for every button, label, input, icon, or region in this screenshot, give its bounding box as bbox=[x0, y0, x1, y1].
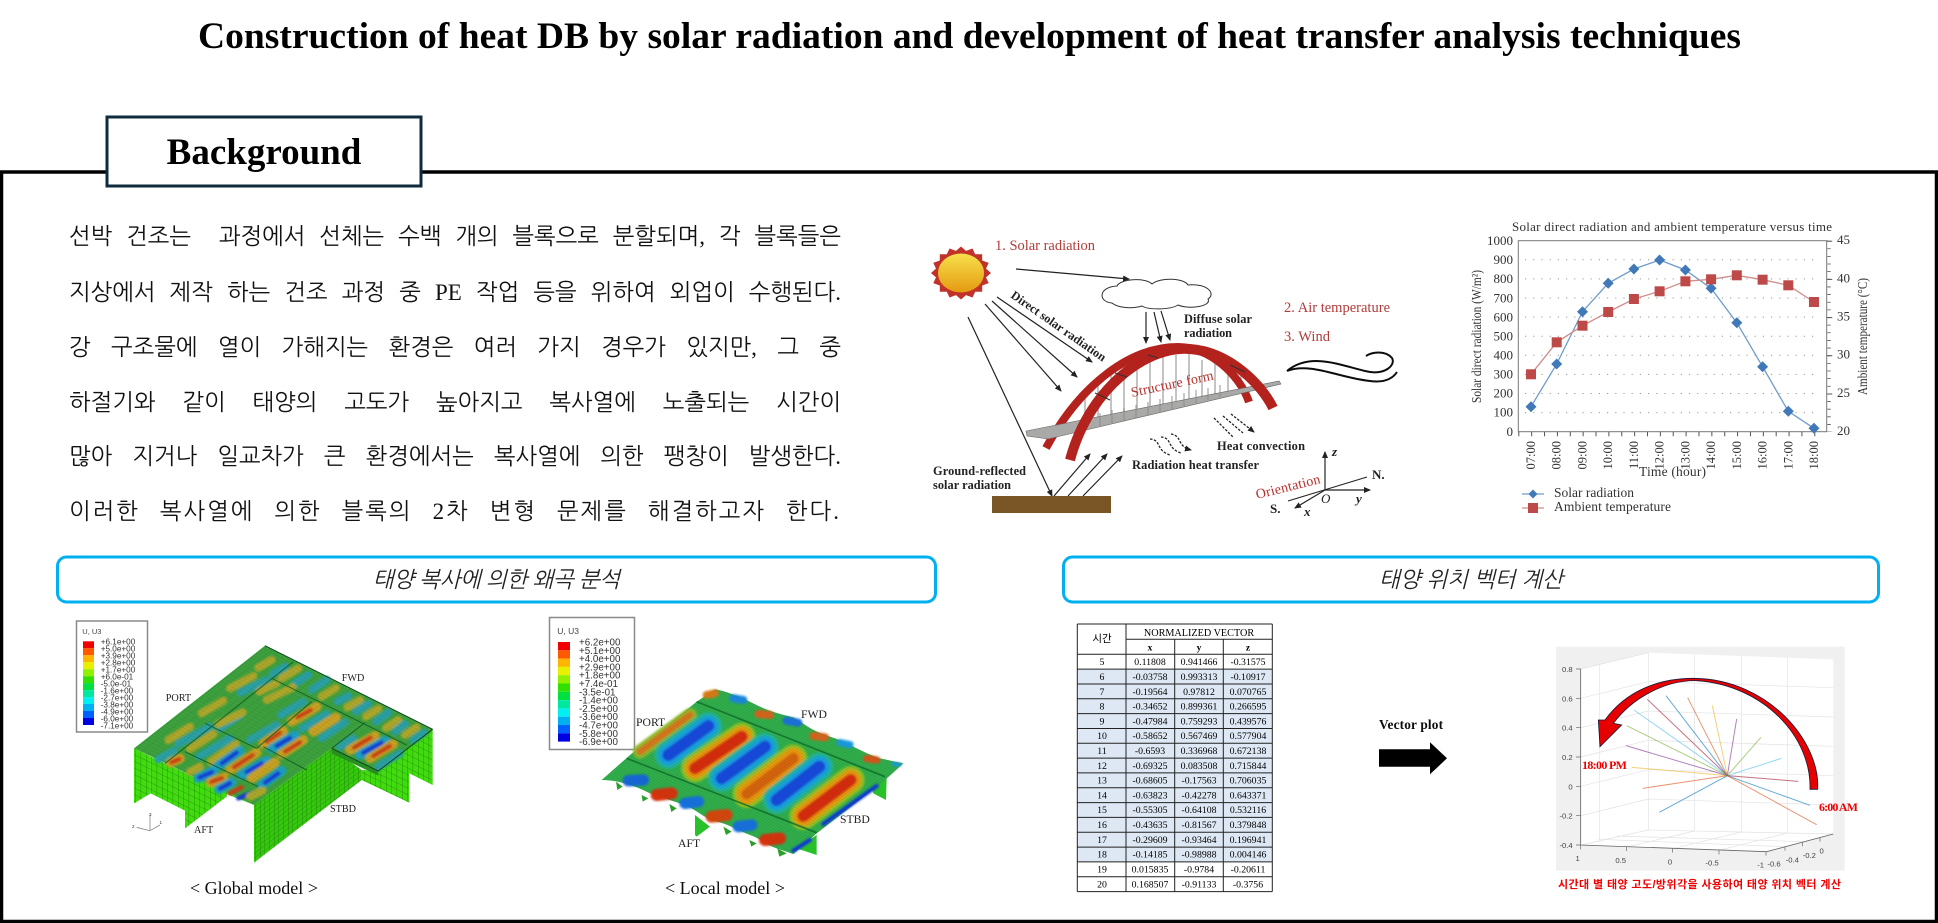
caption: global model: < Global model > bbox=[190, 878, 318, 898]
orientation axes: y bbox=[1354, 491, 1362, 506]
heading: Background tab: Background bbox=[167, 132, 362, 173]
table body: -0.34652 bbox=[1132, 702, 1168, 712]
right axis labels bbox=[1837, 232, 1850, 438]
right axis labels: 35 bbox=[1837, 308, 1850, 324]
table body: -0.17563 bbox=[1181, 776, 1217, 786]
label: air temperature and wind bbox=[1284, 300, 1390, 345]
local model contour legend: +4.0e+00 bbox=[579, 654, 621, 665]
local model contour legend: -4.7e+00 bbox=[579, 720, 618, 732]
table body: -0.58652 bbox=[1132, 731, 1168, 742]
table body: -0.91133 bbox=[1182, 880, 1216, 890]
plot background and axes: 0 bbox=[1820, 846, 1824, 855]
label: structure form: Structure form bbox=[1130, 369, 1215, 401]
x axis labels: 15:00 bbox=[1730, 441, 1744, 469]
figure: local model bbox=[550, 618, 903, 898]
x axis labels: 12:00 bbox=[1653, 441, 1667, 469]
orientation axes: N. bbox=[1372, 467, 1385, 482]
text block: background description: 지상에서 제작 하는 건조 과정 중 PE 작업 등을 위하여 외업이 수행된다. bbox=[69, 280, 841, 305]
section bar: solar position vector: 태양 위치 벡터 계산 bbox=[1379, 567, 1566, 592]
table body: 9 bbox=[1100, 716, 1105, 728]
plot background and axes: 1 bbox=[1576, 854, 1580, 863]
table grid bbox=[1077, 624, 1272, 892]
label: ground-reflected solar radiation: Ground-reflected bbox=[933, 464, 1026, 478]
x axis labels: 11:00 bbox=[1627, 441, 1641, 469]
table body: 0.759293 bbox=[1181, 716, 1217, 728]
section bar: solar position vector bbox=[1064, 557, 1878, 602]
x axis labels: 17:00 bbox=[1781, 441, 1795, 469]
plot background and axes: -0.4 bbox=[1786, 855, 1800, 864]
caption: vector plot: 시간대 별 태양 고도/방위각을 사용하여 태양 위치 벡터 계산 bbox=[1558, 877, 1841, 891]
table body: -0.9784 bbox=[1184, 864, 1214, 876]
label: vector plot: Vector plot bbox=[1379, 717, 1444, 732]
label: 6:00 AM: 6:00 AM bbox=[1819, 800, 1858, 814]
plot background and axes: -0.2 bbox=[1559, 812, 1573, 821]
table body: 11 bbox=[1097, 746, 1107, 757]
grid lines bbox=[1525, 260, 1820, 413]
left axis labels: 900 bbox=[1494, 252, 1513, 267]
table body: 0.015835 bbox=[1132, 864, 1168, 876]
chart: solar radiation and ambient temperature bbox=[1469, 219, 1870, 514]
local model labels: STBD bbox=[840, 813, 870, 826]
global model triad: 2 bbox=[132, 824, 135, 829]
x axis labels: 09:00 bbox=[1576, 441, 1590, 469]
table body: 0.567469 bbox=[1181, 731, 1217, 742]
label: solar radiation: 1. Solar radiation bbox=[995, 238, 1096, 254]
global model contour legend: +2.8e+00 bbox=[101, 658, 136, 667]
table body: 17 bbox=[1097, 835, 1107, 846]
local model contour legend: -5.8e+00 bbox=[579, 729, 618, 740]
chart legend: Ambient temperature bbox=[1554, 499, 1671, 514]
table body: -0.98988 bbox=[1181, 850, 1217, 860]
local model labels: FWD bbox=[801, 708, 827, 721]
x axis labels: 07:00 bbox=[1524, 441, 1538, 469]
caption: local model: < Local model > bbox=[665, 878, 785, 898]
x axis labels bbox=[1524, 441, 1821, 469]
left axis labels: 100 bbox=[1494, 404, 1513, 420]
global model labels: PORT bbox=[166, 693, 192, 704]
left axis labels: 800 bbox=[1494, 271, 1513, 286]
label: ground-reflected solar radiation bbox=[933, 464, 1026, 492]
table body: 10 bbox=[1097, 731, 1107, 742]
global model labels: AFT bbox=[194, 825, 214, 836]
icon: heat convection arrows bbox=[1214, 414, 1254, 437]
global model contour legend: -3.8e+00 bbox=[101, 700, 134, 709]
right axis labels: 20 bbox=[1837, 423, 1850, 438]
plot background and axes: -0.4 bbox=[1559, 841, 1573, 850]
section bar: solar radiation distortion analysis: 태양 복사에 의한 왜곡 분석 bbox=[373, 567, 622, 592]
label: air temperature and wind: 2. Air temperature bbox=[1284, 300, 1390, 316]
table body: 0.577904 bbox=[1230, 731, 1266, 742]
axis ticks bbox=[1518, 241, 1830, 434]
table header: NORMALIZED VECTOR bbox=[1144, 628, 1254, 639]
icon: sun bbox=[931, 246, 991, 300]
global model contour legend: -5.0e-01 bbox=[101, 679, 132, 688]
arrow: sun to cloud bbox=[1016, 269, 1129, 279]
text block: background description: 이러한 복사열에 의한 블록의 2차 변형 문제를 해결하고자 한다. bbox=[69, 499, 841, 524]
arrows: ground reflection bbox=[1054, 454, 1122, 496]
table body: 0.070765 bbox=[1230, 687, 1266, 698]
global model contour legend: +1.7e+00 bbox=[101, 665, 136, 674]
table body: 0.643371 bbox=[1230, 790, 1266, 802]
local model labels: AFT bbox=[678, 837, 700, 850]
table body: -0.93464 bbox=[1181, 835, 1217, 846]
table body: 0.672138 bbox=[1230, 746, 1266, 757]
arrow: sun path curve bbox=[1598, 678, 1818, 789]
right axis title: Ambient temperature (°C) bbox=[1855, 278, 1870, 395]
local model contour legend: +6.2e+00 bbox=[579, 638, 621, 648]
table body: -0.55305 bbox=[1132, 805, 1168, 816]
table body: 5 bbox=[1100, 657, 1105, 668]
local model contour legend: -3.5e-01 bbox=[579, 687, 616, 698]
table body: -0.63823 bbox=[1132, 790, 1168, 802]
x axis labels: 18:00 bbox=[1807, 441, 1821, 469]
table body: -0.31575 bbox=[1230, 657, 1266, 668]
plot background and axes bbox=[1556, 647, 1845, 871]
table body: -0.20611 bbox=[1231, 864, 1265, 876]
table body: 0.439576 bbox=[1230, 716, 1266, 728]
orientation axes: S. bbox=[1270, 501, 1280, 516]
left axis labels: 1000 bbox=[1487, 233, 1513, 248]
right axis labels: 30 bbox=[1837, 346, 1850, 362]
table body: 8 bbox=[1100, 702, 1105, 712]
label: direct solar radiation: Direct solar radiation bbox=[1008, 288, 1109, 364]
plot background and axes: -0.2 bbox=[1803, 851, 1816, 860]
table body: 0.97812 bbox=[1183, 687, 1215, 698]
table body: 7 bbox=[1100, 687, 1105, 698]
text block: background description bbox=[69, 224, 841, 524]
table header: 시간 bbox=[1092, 633, 1112, 645]
label: diffuse solar radiation: radiation bbox=[1184, 326, 1232, 340]
x axis title: Time (hour) bbox=[1639, 464, 1706, 479]
heading: Background tab bbox=[107, 117, 421, 186]
right axis labels: 45 bbox=[1837, 232, 1850, 247]
table body: -0.3756 bbox=[1233, 880, 1263, 890]
plot background and axes: 0 bbox=[1668, 858, 1672, 867]
label: diffuse solar radiation bbox=[1184, 312, 1253, 340]
table body: -0.64108 bbox=[1181, 805, 1217, 816]
table header: x bbox=[1148, 644, 1153, 654]
table body: 0.196941 bbox=[1230, 835, 1266, 846]
arrow: table to vector plot bbox=[1379, 742, 1447, 774]
global model triad bbox=[132, 812, 162, 831]
table header bbox=[1092, 628, 1254, 654]
table body bbox=[1097, 657, 1266, 890]
global model contour legend: +6.0e-01 bbox=[101, 672, 134, 681]
table header: z bbox=[1246, 644, 1251, 654]
table body: -0.03758 bbox=[1132, 672, 1168, 683]
table body: 0.266595 bbox=[1230, 702, 1266, 712]
global model contour legend: -2.7e+00 bbox=[101, 693, 134, 702]
table body: 0.083508 bbox=[1181, 761, 1217, 772]
global model contour legend: -1.6e+00 bbox=[101, 686, 134, 695]
table body: 0.941466 bbox=[1181, 657, 1217, 668]
table blue rows bbox=[1077, 669, 1272, 862]
table body: -0.68605 bbox=[1132, 776, 1168, 786]
chart legend bbox=[1522, 485, 1671, 514]
global model contour legend: +3.9e+00 bbox=[101, 651, 136, 660]
global model labels bbox=[166, 673, 364, 836]
local model labels bbox=[636, 708, 870, 850]
chart title: Solar direct radiation and ambient temperature versus time bbox=[1512, 219, 1832, 234]
series: solar radiation bbox=[1526, 254, 1820, 434]
local model contour legend: +1.8e+00 bbox=[579, 671, 621, 682]
section bar: solar radiation distortion analysis bbox=[58, 557, 936, 602]
global model contour legend bbox=[76, 621, 148, 732]
right axis labels: 40 bbox=[1837, 270, 1850, 286]
plot background and axes: -0.5 bbox=[1705, 859, 1719, 868]
table body: -0.81567 bbox=[1181, 820, 1217, 831]
table body: 14 bbox=[1097, 790, 1107, 802]
global model labels: FWD bbox=[342, 673, 364, 684]
table body: 0.715844 bbox=[1230, 761, 1266, 772]
plot background and axes: 0.8 bbox=[1562, 665, 1573, 674]
local model contour legend: +7.4e-01 bbox=[579, 679, 618, 690]
text block: background description: 선박 건조는 과정에서 선체는 수백 개의 블록으로 분할되며, 각 블록들은 bbox=[69, 224, 841, 249]
text block: background description: 많아 지거나 일교차가 큰 환경에서는 복사열에 의한 팽창이 발생한다. bbox=[69, 444, 841, 469]
local model contour legend: +5.1e+00 bbox=[579, 646, 621, 657]
title: Construction of heat DB by solar radiation and development of heat transfer analysis techniques bbox=[198, 16, 1741, 57]
table header: y bbox=[1197, 644, 1202, 654]
bridge structure bbox=[1026, 347, 1281, 460]
table body: 0.336968 bbox=[1181, 746, 1217, 757]
table body: -0.10917 bbox=[1230, 672, 1266, 683]
table body: 0.004146 bbox=[1230, 850, 1266, 860]
solar position vectors bbox=[1626, 696, 1817, 825]
text block: background description: 하절기와 같이 태양의 고도가 높아지고 복사열에 노출되는 시간이 bbox=[69, 390, 841, 415]
orientation axes: Orientation bbox=[1254, 472, 1322, 503]
table body: 0.11808 bbox=[1134, 657, 1166, 668]
label: radiation heat transfer: Radiation heat transfer bbox=[1132, 458, 1259, 472]
label: air temperature and wind: 3. Wind bbox=[1284, 329, 1331, 345]
table body: -0.19564 bbox=[1132, 687, 1168, 698]
x axis labels: 16:00 bbox=[1756, 441, 1770, 469]
local model contour legend bbox=[550, 618, 634, 750]
orientation axes: O bbox=[1321, 491, 1331, 506]
local model contour legend: U, U3 bbox=[557, 626, 579, 636]
plot background and axes: 0.4 bbox=[1562, 724, 1573, 733]
x axis labels: 08:00 bbox=[1550, 441, 1564, 469]
table body: -0.6593 bbox=[1135, 746, 1165, 757]
left axis labels: 0 bbox=[1506, 424, 1513, 439]
global model ship block bbox=[134, 646, 433, 863]
left axis title: Solar direct radiation (W/m²) bbox=[1469, 270, 1484, 403]
table: normalized vector bbox=[1077, 624, 1272, 892]
x axis labels: 13:00 bbox=[1678, 441, 1692, 469]
orientation axes: z bbox=[1331, 444, 1338, 459]
figure: global model bbox=[76, 621, 433, 898]
table body: -0.14185 bbox=[1132, 850, 1168, 860]
global model contour legend: -6.0e+00 bbox=[101, 714, 134, 723]
table body: 6 bbox=[1100, 672, 1105, 683]
left axis labels: 300 bbox=[1494, 366, 1513, 382]
icon: wind swirl bbox=[1287, 352, 1397, 381]
x axis labels: 14:00 bbox=[1704, 441, 1718, 469]
global model contour legend: +5.0e+00 bbox=[101, 644, 136, 653]
icon: cloud bbox=[1102, 279, 1211, 309]
label: 18:00 PM: 18:00 PM bbox=[1582, 758, 1627, 772]
series: ambient temperature bbox=[1526, 270, 1819, 379]
label: diffuse solar radiation: Diffuse solar bbox=[1184, 312, 1253, 326]
orientation axes bbox=[1254, 444, 1385, 519]
table body: -0.69325 bbox=[1132, 761, 1168, 772]
table body: -0.47984 bbox=[1132, 716, 1168, 728]
plot background and axes: 0.5 bbox=[1615, 856, 1626, 865]
table body: 0.899361 bbox=[1181, 702, 1217, 712]
plot frame bbox=[1518, 241, 1827, 432]
local model contour legend: -6.9e+00 bbox=[579, 737, 618, 748]
global model contour legend: U, U3 bbox=[82, 627, 101, 636]
arrows: diffuse radiation bbox=[1146, 311, 1170, 343]
plot background and axes: 0 bbox=[1568, 782, 1573, 791]
global model labels: STBD bbox=[330, 804, 356, 815]
table body: 0.993313 bbox=[1181, 672, 1217, 683]
plot background and axes: -0.6 bbox=[1767, 860, 1781, 869]
text block: background description: 강 구조물에 열이 가해지는 환경은 여러 가지 경우가 있지만, 그 중 bbox=[69, 335, 841, 360]
table body: 0.168507 bbox=[1132, 880, 1168, 890]
local model plate bbox=[602, 689, 903, 857]
ground block bbox=[992, 496, 1111, 513]
x axis labels: 10:00 bbox=[1601, 441, 1615, 469]
left axis labels: 500 bbox=[1494, 328, 1513, 344]
table body: 12 bbox=[1097, 761, 1107, 772]
orientation axes: x bbox=[1303, 504, 1311, 519]
table body: 0.379848 bbox=[1230, 820, 1266, 831]
left axis labels: 700 bbox=[1494, 290, 1513, 306]
table body: 15 bbox=[1097, 805, 1107, 816]
global model triad: 1 bbox=[160, 820, 162, 825]
icon: radiation heat transfer arrows bbox=[1150, 434, 1191, 455]
local model contour legend: -1.4e+00 bbox=[579, 696, 618, 707]
local model contour legend: -3.6e+00 bbox=[579, 712, 618, 723]
plot background and axes: 0.2 bbox=[1562, 753, 1573, 762]
table body: 0.706035 bbox=[1230, 776, 1266, 786]
label: ground-reflected solar radiation: solar radiation bbox=[933, 478, 1011, 492]
left axis labels bbox=[1487, 233, 1513, 439]
plot background and axes: -1 bbox=[1757, 860, 1764, 869]
global model contour legend: +6.1e+00 bbox=[101, 637, 136, 646]
table body: 19 bbox=[1097, 864, 1107, 876]
local model contour legend: -2.5e+00 bbox=[579, 704, 618, 715]
global model contour legend: -7.1e+00 bbox=[101, 721, 134, 730]
global model triad: 3 bbox=[149, 812, 152, 817]
table body: -0.29609 bbox=[1132, 835, 1168, 846]
local model labels: PORT bbox=[636, 716, 665, 729]
local model contour legend: +2.9e+00 bbox=[579, 662, 621, 673]
table body: 20 bbox=[1097, 880, 1107, 890]
right axis labels: 25 bbox=[1837, 385, 1850, 400]
table body: -0.43635 bbox=[1132, 820, 1168, 831]
table body: 16 bbox=[1097, 820, 1107, 831]
table body: 0.532116 bbox=[1230, 805, 1266, 816]
diagram: bridge solar heat environment bbox=[931, 238, 1397, 519]
table body: -0.42278 bbox=[1181, 790, 1217, 802]
left axis labels: 600 bbox=[1494, 310, 1513, 324]
table body: 13 bbox=[1097, 776, 1107, 786]
plot background and axes: 0.6 bbox=[1562, 694, 1573, 703]
left axis labels: 200 bbox=[1494, 386, 1513, 400]
global model contour legend: -4.9e+00 bbox=[101, 707, 134, 716]
chart: 3D solar vector plot bbox=[1556, 647, 1858, 891]
left axis labels: 400 bbox=[1494, 348, 1513, 362]
chart legend: Solar radiation bbox=[1554, 485, 1634, 500]
arrows: direct radiation bbox=[968, 297, 1092, 496]
label: heat convection: Heat convection bbox=[1217, 439, 1305, 453]
table body: 18 bbox=[1097, 850, 1107, 860]
